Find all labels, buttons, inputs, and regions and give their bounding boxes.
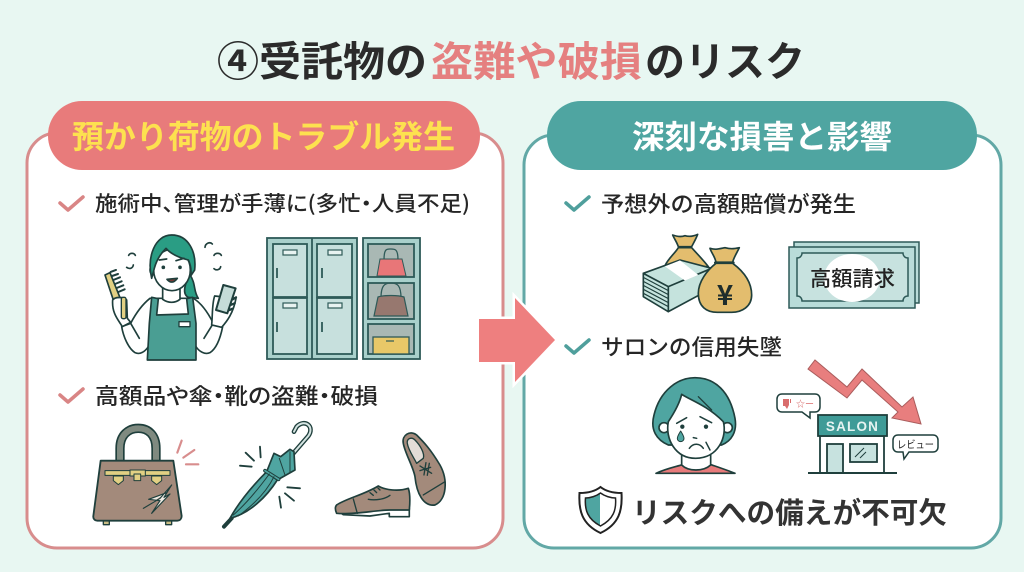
title: のリスク (645, 28, 805, 88)
icon: damaged handbag (93, 428, 198, 525)
icon: shoes (335, 433, 445, 517)
icon: shield (579, 487, 622, 533)
arrow: left to right (479, 298, 555, 382)
heading: right pill: 深刻な損害と影響 (632, 112, 892, 158)
callout: review bubble (893, 435, 938, 459)
title (217, 28, 805, 88)
icon: expensive invoice: 高額請求 (810, 263, 895, 293)
item: busy management: 施術中、管理が手薄に(多忙・人員不足) (95, 188, 470, 218)
heading: left pill (48, 101, 480, 170)
icon: lockers (267, 238, 357, 359)
impact lines (177, 441, 198, 464)
heading: left pill: 預かり荷物のトラブル発生 (72, 112, 455, 158)
title: 盗難や破損 (431, 28, 642, 88)
icon: broken umbrella (224, 423, 310, 527)
heading: right pill (547, 101, 977, 170)
icon: salon shop (808, 415, 897, 473)
phone (212, 296, 236, 327)
callout: bad rating bubble (777, 394, 820, 418)
title: ④受託物の (217, 28, 427, 88)
callout: review bubble: レビュー (897, 437, 934, 452)
callout: bad rating bubble: ☆ー (796, 397, 814, 410)
icon: expensive invoice (789, 242, 919, 308)
item: unexpected compensation: 予想外の高額賠償が発生 (601, 187, 856, 219)
icon: money bags and cash (643, 234, 752, 314)
icon: shelf with bags (363, 238, 420, 359)
icon: busy staff woman (105, 235, 236, 360)
icon: crying woman (653, 378, 736, 473)
comb (105, 273, 121, 302)
sweat marks (127, 243, 221, 270)
panel: right impact (524, 101, 1001, 548)
item: loss of trust: サロンの信用失墜 (601, 330, 782, 362)
panel: left trouble (27, 101, 503, 548)
icon: salon shop: SALON (826, 419, 879, 434)
motion lines (240, 447, 300, 508)
icon: falling arrow (808, 360, 921, 424)
icon: money bags and cash: ¥ (717, 274, 734, 314)
callout: preparation essential: リスクへの備えが不可欠 (632, 490, 947, 532)
item: theft of valuables: 高額品や傘・靴の盗難・破損 (95, 379, 378, 411)
